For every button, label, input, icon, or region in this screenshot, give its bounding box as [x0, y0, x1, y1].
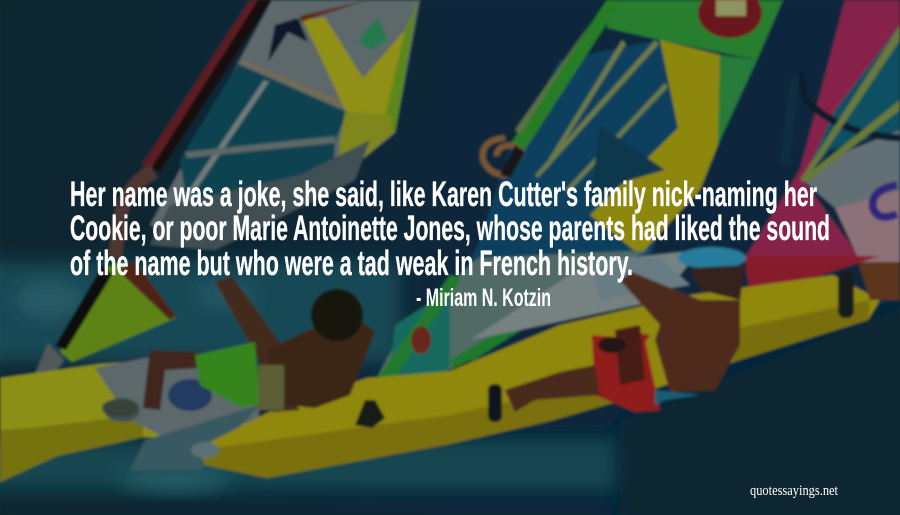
- author attribution: - Miriam N. Kotzin: [416, 284, 551, 312]
- spray on the board: [104, 379, 219, 458]
- left sail: [108, 0, 420, 258]
- left board: [0, 350, 260, 482]
- left sail lower part: [6, 262, 176, 422]
- windsurfer in red shorts and blue cap: [488, 247, 746, 422]
- windsurfer in green shorts: [102, 276, 375, 417]
- right board: [198, 258, 900, 478]
- site watermark: quotessayings.net: [750, 483, 838, 499]
- quote text: [70, 174, 830, 283]
- centre sail: [372, 0, 783, 385]
- right sail: [745, 0, 900, 298]
